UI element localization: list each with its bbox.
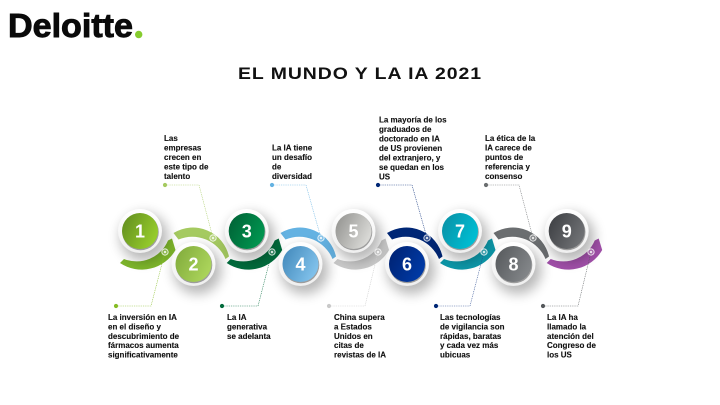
text 6: del extranjero, y bbox=[379, 154, 441, 162]
text 6: US bbox=[379, 172, 391, 182]
ribbon chain bbox=[120, 228, 602, 270]
text 6: de US provienen bbox=[379, 144, 442, 153]
leader 3 bbox=[220, 249, 275, 308]
text 9: Congreso de bbox=[547, 341, 596, 350]
ribbon 4 bbox=[280, 228, 336, 259]
text 6: La mayoría de los bbox=[379, 116, 447, 124]
text 9: llamado la bbox=[547, 322, 587, 331]
text 1: significativamente bbox=[108, 351, 178, 360]
text 7: Las tecnologías bbox=[440, 313, 501, 322]
text 9: La IA ha bbox=[547, 313, 578, 322]
leader 6 bbox=[376, 183, 430, 241]
text 5: Unidos en bbox=[334, 332, 373, 341]
ribbon 3 bbox=[227, 238, 282, 270]
text 3: generativa bbox=[227, 322, 268, 331]
circle 1: 1 bbox=[135, 222, 145, 242]
text 1: fármacos aumenta bbox=[108, 341, 179, 350]
circle 8: 8 bbox=[508, 254, 519, 274]
text 6: graduados de bbox=[379, 125, 432, 134]
text 9: los US bbox=[547, 351, 573, 360]
circle 9 bbox=[545, 209, 595, 261]
text 1: La inversión en IA bbox=[108, 313, 177, 322]
ribbon 1 bbox=[120, 238, 176, 270]
text 4: de bbox=[272, 162, 282, 172]
text 9: atención del bbox=[547, 332, 594, 341]
circle 5 bbox=[332, 209, 382, 261]
ribbon 2 bbox=[174, 228, 229, 259]
circle 3 bbox=[225, 209, 275, 261]
circle 4 bbox=[278, 242, 328, 294]
text 2: crecen en bbox=[164, 153, 201, 162]
text 2: este tipo de bbox=[164, 162, 209, 172]
logo: Deloitte: Deloitte bbox=[8, 7, 133, 44]
text 3: se adelanta bbox=[227, 332, 271, 341]
text 5: China supera bbox=[334, 313, 385, 322]
text 8: IA carece de bbox=[485, 144, 532, 152]
text 4: diversidad bbox=[272, 172, 312, 181]
text 4: La IA tiene bbox=[272, 144, 313, 152]
text 8: puntos de bbox=[485, 153, 524, 162]
leader 5 bbox=[327, 249, 381, 308]
leader 9 bbox=[541, 249, 594, 308]
text 5: revistas de IA bbox=[334, 351, 386, 360]
circle 6 bbox=[385, 242, 435, 294]
text 7: y cada vez más bbox=[440, 341, 499, 350]
circle 7 bbox=[438, 209, 488, 261]
ribbon 7 bbox=[440, 238, 496, 270]
text 6: se quedan en los bbox=[379, 163, 444, 172]
circle 2 bbox=[172, 242, 222, 294]
ribbon 5 bbox=[334, 238, 389, 270]
text 2: empresas bbox=[164, 144, 202, 152]
leader 1 bbox=[114, 249, 168, 308]
leader 8 bbox=[484, 183, 536, 241]
text 6: doctorado en IA bbox=[379, 134, 440, 144]
ribbon 8 bbox=[494, 228, 549, 259]
circle 5: 5 bbox=[348, 222, 359, 242]
text 8: consenso bbox=[485, 172, 522, 181]
text 8: referencia y bbox=[485, 162, 530, 172]
circle 2: 2 bbox=[188, 254, 199, 274]
text 4: un desafío bbox=[272, 153, 312, 162]
text 5: a Estados bbox=[334, 322, 372, 331]
circle 1 bbox=[118, 209, 168, 261]
text 3: La IA bbox=[227, 313, 247, 322]
text 2: Las bbox=[164, 134, 178, 143]
circle 3: 3 bbox=[242, 222, 252, 242]
text 5: citas de bbox=[334, 341, 364, 350]
leader 4 bbox=[270, 183, 324, 241]
title: EL MUNDO Y LA IA 2021 bbox=[238, 65, 482, 83]
ribbon 6 bbox=[387, 228, 442, 259]
text 8: La ética de la bbox=[485, 134, 536, 143]
circle 8 bbox=[492, 242, 542, 294]
circle 9: 9 bbox=[562, 222, 572, 242]
ribbon 9 bbox=[547, 238, 602, 270]
leader 7 bbox=[434, 249, 487, 308]
text 1: en el diseño y bbox=[108, 322, 161, 331]
leader 2 bbox=[163, 183, 216, 241]
text 7: ubicuas bbox=[440, 351, 471, 360]
circle 4: 4 bbox=[295, 254, 306, 274]
text 7: de vigilancia son bbox=[440, 322, 505, 331]
text 7: rápidas, baratas bbox=[440, 332, 502, 341]
text 2: talento bbox=[164, 172, 190, 181]
circle 7: 7 bbox=[455, 222, 465, 242]
circle 6: 6 bbox=[402, 254, 412, 274]
text 1: descubrimiento de bbox=[108, 332, 180, 341]
